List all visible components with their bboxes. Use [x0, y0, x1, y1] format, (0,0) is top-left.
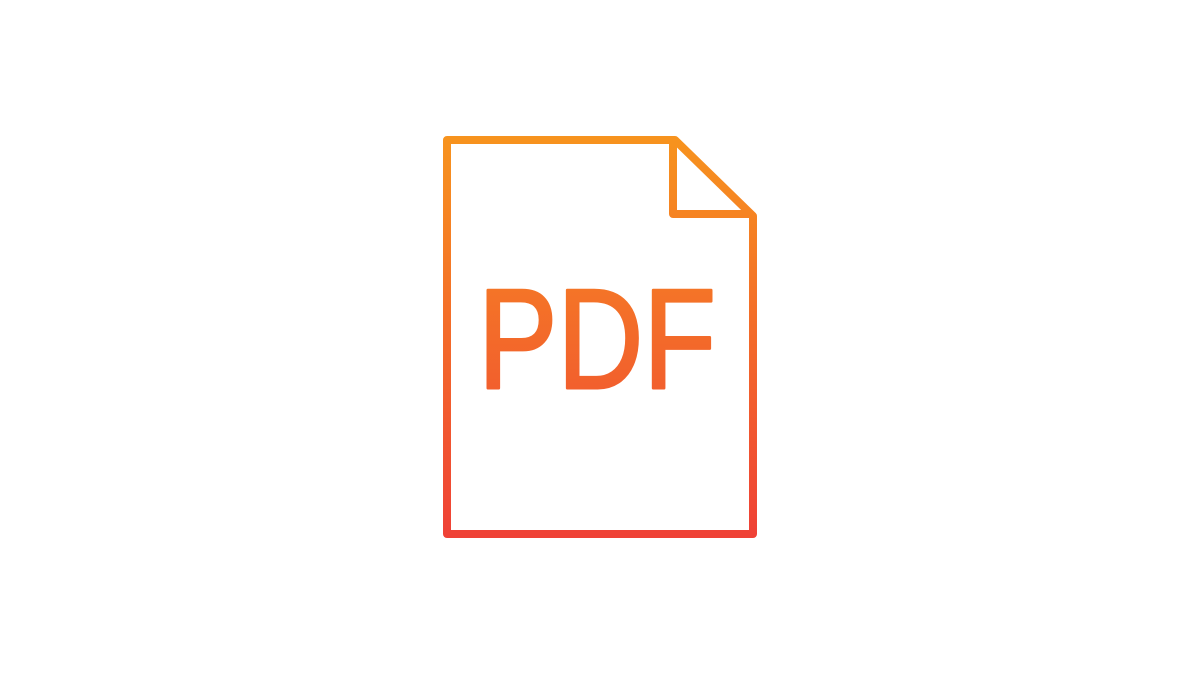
icon: document outline	[447, 140, 753, 534]
label: PDF: PDF	[478, 260, 716, 419]
icon: folded corner	[673, 143, 750, 214]
